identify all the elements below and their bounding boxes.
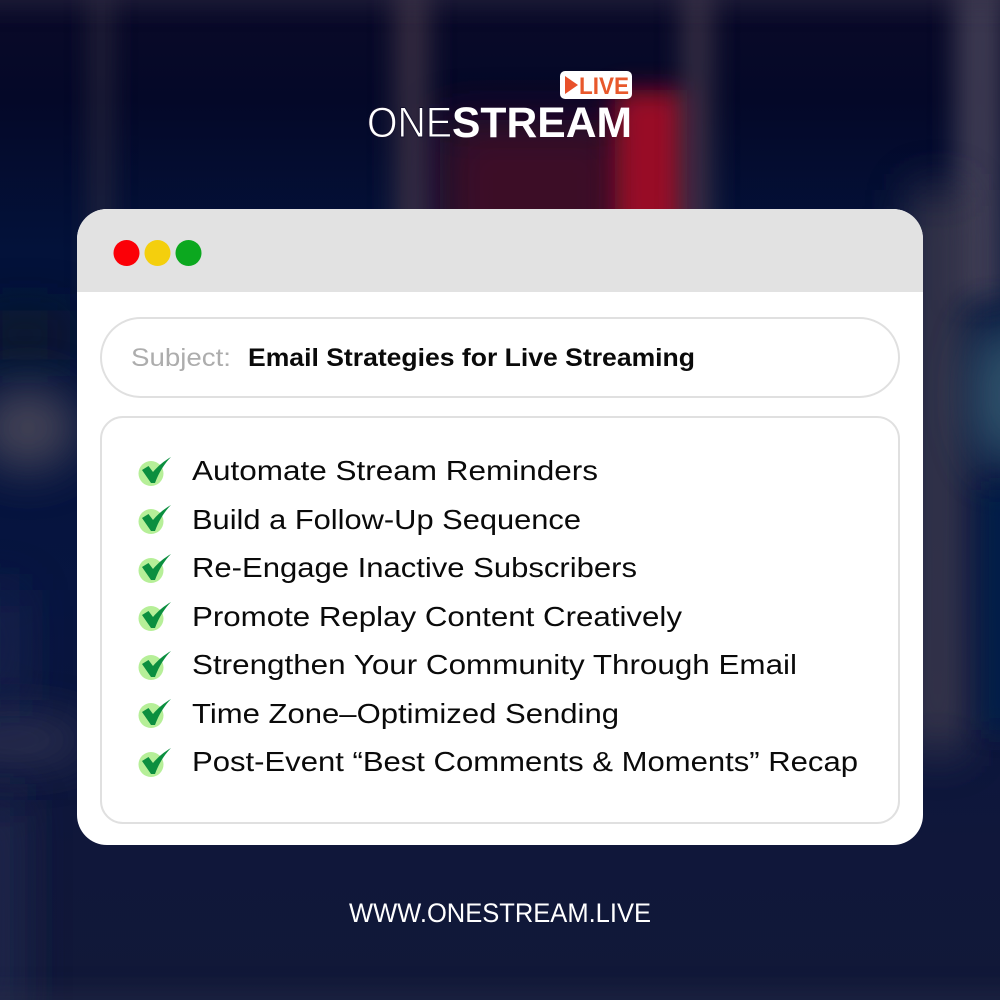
- subject line: Email Strategies for Live Streaming: [248, 344, 695, 372]
- item 3: Re-Engage Inactive Subscribers: [192, 552, 637, 583]
- item 4: Promote Replay Content Creatively: [192, 601, 682, 632]
- logo wordmark: [367, 99, 632, 147]
- logo: OneStream Live: [367, 71, 632, 147]
- logo live badge: [560, 71, 632, 100]
- logo live badge: LIVE: [579, 73, 629, 100]
- logo wordmark: ONE: [367, 99, 452, 147]
- window control dots: [114, 240, 202, 266]
- strategies list: [101, 417, 899, 823]
- logo wordmark: STREAM: [452, 99, 632, 147]
- item 1: Automate Stream Reminders: [192, 455, 598, 486]
- panel: email window: [77, 209, 923, 845]
- window title bar: [77, 209, 923, 292]
- item 6: Time Zone–Optimized Sending: [192, 698, 619, 729]
- item 2: Build a Follow-Up Sequence: [192, 504, 581, 535]
- website url: WWW.ONESTREAM.LIVE: [349, 898, 651, 928]
- subject line: Subject:: [131, 344, 231, 372]
- item 7: Post-Event “Best Comments & Moments” Recap: [192, 746, 858, 777]
- subject line: [101, 318, 899, 397]
- item 5: Strengthen Your Community Through Email: [192, 649, 797, 680]
